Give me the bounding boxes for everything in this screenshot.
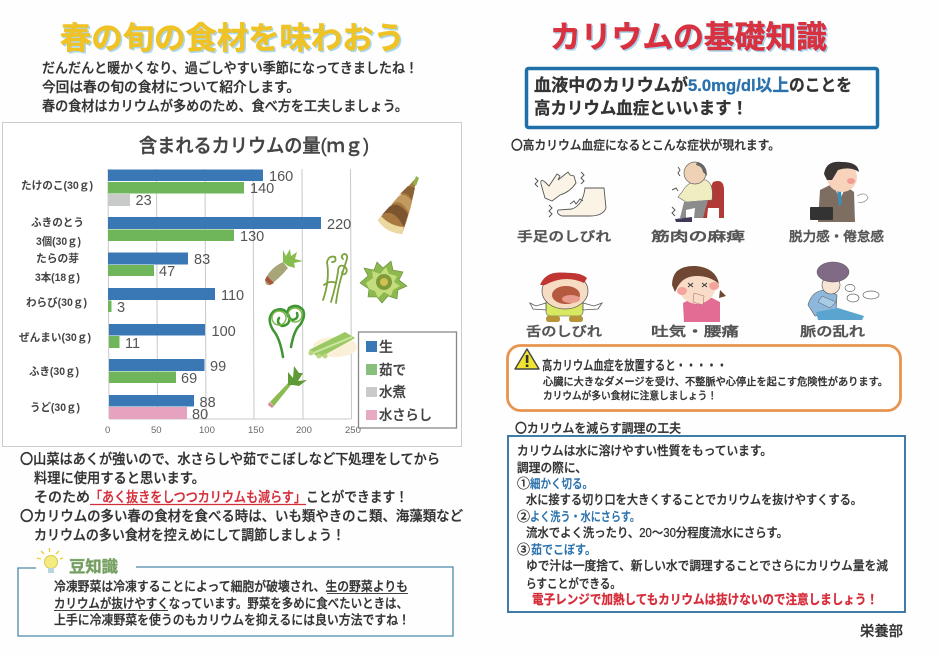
tip 1: ① [517, 476, 530, 491]
tip 2: ② [517, 509, 530, 524]
department name: 栄養部 [860, 623, 903, 639]
bars: udo: 80 [192, 407, 208, 423]
x axis labels: 50 [151, 425, 162, 436]
tip 2: よく洗う・水にさらす。 [530, 509, 640, 524]
panel: warning box: 心臓に大きなダメージを受け、不整脈や心停止を起こす危険性があります。 [543, 375, 888, 388]
x axis labels: 200 [296, 425, 312, 436]
trivia heading: 豆知識 [69, 557, 118, 576]
microwave warning: 電子レンジで加熱してもカリウムは抜けないので注意しましょう！ [532, 592, 878, 607]
category labels: うど(30ｇ) [30, 400, 80, 414]
icon: warabi [323, 254, 347, 303]
symptom: numb hands and feet: 手足のしびれ [517, 229, 611, 244]
legend: 生 [379, 339, 393, 355]
bars: udo [109, 395, 216, 423]
bars: fuki: 69 [181, 371, 197, 387]
category labels [19, 179, 93, 414]
text block: wild vegetables notes: 「あく抜きをしつつカリウムも減らす」 [90, 489, 306, 505]
x axis labels: 100 [199, 425, 215, 436]
title: spring foods: 春の旬の食材を味わおう [62, 22, 406, 58]
tip 2: 流水でよく洗ったり、20～30分程度流水にさらす。 [526, 525, 788, 540]
icon: fuki stalks [308, 332, 357, 358]
panel: definition box [526, 68, 878, 128]
bars: fuki: 99 [210, 359, 226, 375]
legend: 水煮 [379, 384, 406, 400]
tip 3: ③ [517, 542, 530, 557]
text block: wild vegetables notes: カリウムの多い食材を控えめにして調節しましょう！ [34, 527, 345, 543]
text block: wild vegetables notes: 〇山菜はあくが強いので、水さらしや茹でこぼしなど下処理をしてから [20, 451, 440, 467]
tip 1: 細かく切る。 [530, 476, 593, 491]
title: potassium basics: カリウムの基礎知識 [550, 20, 827, 55]
symptom: irregular pulse [800, 262, 879, 339]
title: spring foods: 春の旬の食材を味わおう [60, 21, 405, 56]
symptom: nausea and back pain [651, 266, 739, 339]
symptom: muscle paralysis [651, 162, 745, 244]
panel: cooking tips box [508, 436, 905, 612]
panel: definition box: のことを [789, 76, 852, 95]
symptom: irregular pulse: 脈の乱れ [800, 324, 865, 339]
tip 1 [517, 476, 862, 507]
bars: tara no me: 83 [194, 252, 210, 268]
text block: wild vegetables notes [20, 451, 463, 543]
panel: warning box [508, 346, 900, 410]
symptom: nausea and back pain: 吐気・腰痛 [651, 324, 739, 339]
category labels: ふきのとう [31, 216, 84, 229]
panel: potassium bar chart [2, 122, 462, 446]
bars: warabi: 110 [221, 288, 244, 304]
bars: takenoko [108, 169, 293, 209]
bars: takenoko: 23 [136, 193, 152, 209]
category labels: わらび(30ｇ) [26, 295, 87, 309]
panel: definition box: 血液中のカリウムが [534, 75, 688, 95]
category labels: たけのこ(30ｇ) [21, 179, 93, 192]
text block: wild vegetables notes: 〇カリウムの多い春の食材を食べる時は、いも類やきのこ類、海藻類など [20, 508, 463, 524]
tip 2 [517, 509, 788, 540]
icon: zenmai [270, 306, 304, 357]
symptom: muscle paralysis: 筋肉の麻痺 [651, 229, 745, 244]
trivia body text: 冷凍野菜は冷凍することによって細胞が破壊され、生の野菜よりも [54, 579, 408, 594]
trivia body text [54, 579, 410, 628]
icon: fukinoto bud [360, 261, 407, 303]
title: potassium basics: カリウムの基礎知識 [552, 22, 828, 56]
x axis labels: 0 [105, 425, 110, 436]
bars: takenoko: 160 [269, 169, 293, 185]
bars: warabi: 3 [117, 300, 125, 316]
symptom: numb tongue: 舌のしびれ [526, 324, 602, 339]
intro text [42, 60, 418, 114]
symptom: fatigue [789, 162, 884, 244]
symptoms heading: 〇高カリウム血症になるとこんな症状が現れます。 [511, 138, 780, 152]
panel: trivia box [18, 548, 453, 636]
panel: cooking tips box: 調理の際に、 [517, 461, 587, 475]
tip 3: ゆで汁は一度捨て、新しい水で調理することでさらにカリウム量を減 [526, 558, 888, 573]
intro text: 春の食材はカリウムが多めのため、食べ方を工夫しましょう。 [42, 98, 408, 114]
tip 3: らすことができる。 [526, 576, 621, 591]
panel: warning box: カリウムが多い食材に注意しましょう！ [543, 389, 717, 402]
icon: bamboo shoot [378, 176, 419, 234]
category labels: ふき(30ｇ) [29, 365, 79, 378]
x axis labels: 150 [248, 425, 264, 436]
panel: warning box: 高カリウム血症を放置すると・・・・・ [542, 358, 727, 373]
bars: zenmai: 100 [212, 324, 236, 340]
tip 3 [517, 542, 888, 591]
bars: zenmai [109, 324, 236, 352]
trivia body text: カリウムが抜けやすくなっています。野菜を多めに食べたいときは、 [54, 596, 408, 611]
bars: fuki [109, 359, 226, 387]
bars: takenoko: 140 [250, 181, 274, 197]
bars: fukinoto: 130 [240, 229, 264, 245]
symptom: fatigue: 脱力感・倦怠感 [789, 229, 884, 244]
text block: wild vegetables notes: そのため [34, 489, 90, 505]
x axis labels: 250 [345, 425, 361, 436]
intro text: だんだんと暖かくなり、過ごしやすい季節になってきましたね！ [42, 60, 418, 76]
icon: udo [268, 366, 307, 408]
icon: tara sprout [265, 249, 303, 285]
bars: fukinoto: 220 [327, 217, 351, 233]
symptom: numb hands and feet [517, 172, 611, 244]
panel: cooking tips box: カリウムは水に溶けやすい性質をもっています。 [517, 443, 772, 458]
intro text: 今回は春の旬の食材について紹介します。 [42, 79, 300, 95]
category labels: 3本(18ｇ) [35, 270, 80, 284]
tip 3: 茹でこぼす。 [531, 542, 596, 557]
text block: wild vegetables notes: ことができます！ [306, 489, 408, 505]
chart title: 含まれるカリウムの量(ｍｇ) [139, 135, 369, 157]
x axis labels [105, 425, 361, 436]
bars: tara no me [108, 252, 210, 280]
legend: 茹で [379, 362, 406, 378]
category labels: ぜんまい(30ｇ) [19, 331, 91, 344]
trivia body text: 上手に冷凍野菜を使うのもカリウムを抑えるには良い方法ですね！ [54, 612, 410, 628]
bars: tara no me: 47 [159, 264, 175, 280]
bars: zenmai: 11 [125, 336, 140, 352]
symptom: numb tongue [526, 272, 602, 339]
text block: wild vegetables notes: 料理に使用すると思います。 [34, 470, 205, 486]
tip 1: 水に接する切り口を大きくすることでカリウムを抜けやすくする。 [526, 492, 862, 507]
bars: warabi [108, 288, 244, 316]
bars: udo: 88 [200, 395, 216, 411]
cooking tips heading: 〇カリウムを減らす調理の工夫 [515, 420, 681, 436]
category labels: たらの芽 [36, 251, 79, 265]
bars: fukinoto [108, 217, 351, 245]
legend [358, 332, 456, 428]
icon: warning triangle [515, 349, 539, 369]
panel: definition box: 5.0mg/dl以上 [688, 76, 789, 95]
category labels: 3個(30ｇ) [36, 235, 81, 248]
icon: light bulb [37, 548, 63, 573]
legend: 水さらし [379, 407, 432, 423]
panel: definition box: 高カリウム血症といいます！ [534, 98, 748, 118]
